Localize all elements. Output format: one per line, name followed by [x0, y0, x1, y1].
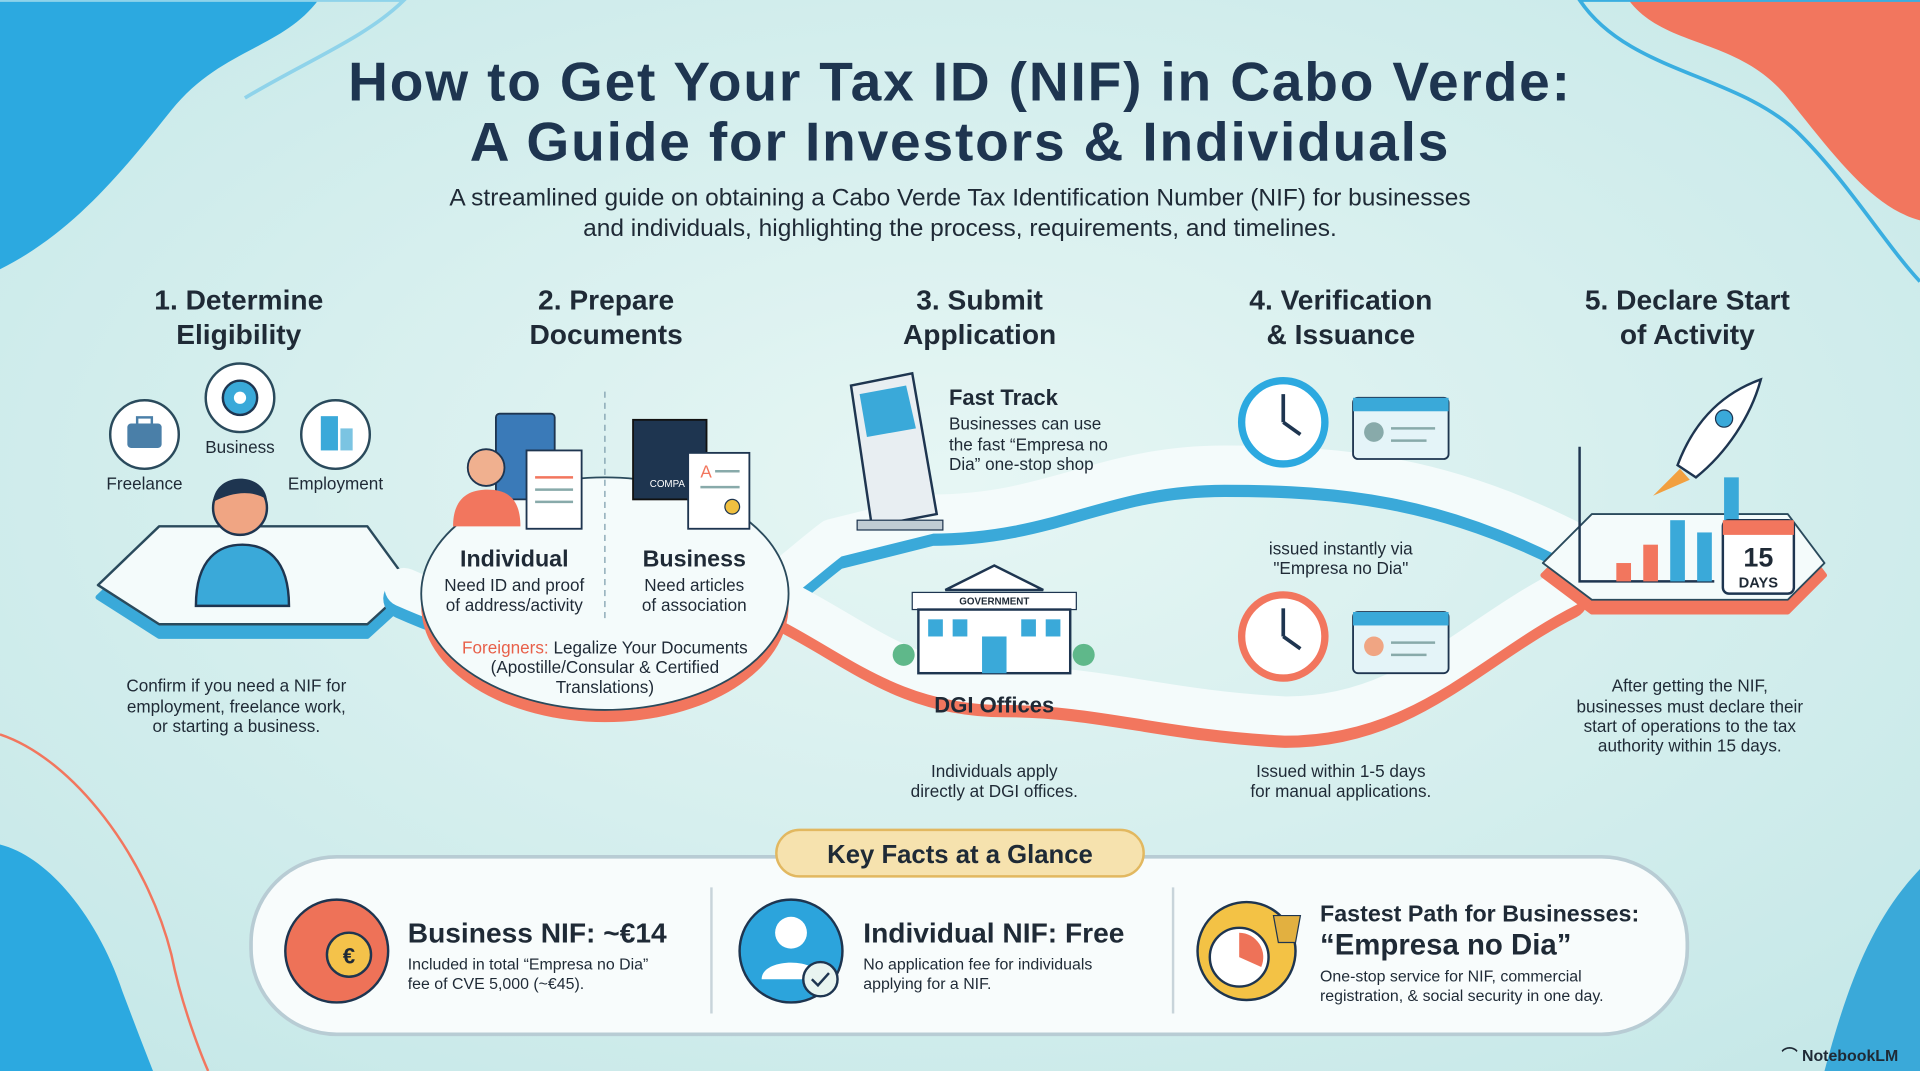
step 2: Documents	[529, 319, 683, 350]
path ribbon	[98, 465, 1824, 727]
icon: company documents	[633, 420, 749, 529]
step 2: 2. Prepare	[538, 285, 674, 316]
icon: government building	[893, 565, 1095, 673]
step 2: Foreigners: Legalize Your Documents	[462, 638, 748, 658]
fact: business fee: Included in total “Empresa no Dia”	[408, 956, 648, 973]
fact: business fee: fee of CVE 5,000 (~€45).	[408, 976, 584, 993]
subtitle	[449, 185, 1471, 242]
icon: business	[206, 364, 274, 432]
step 2: Need ID and proof	[444, 575, 585, 595]
icon: thinking person	[196, 479, 289, 606]
step 1: Freelance	[106, 474, 183, 494]
step 2: of association	[642, 595, 747, 615]
step 2: Business	[643, 546, 746, 572]
watermark: ⌒ NotebookLM	[1782, 1046, 1898, 1065]
step 1: Business	[205, 437, 275, 457]
title: A Guide for Investors & Individuals	[470, 110, 1450, 172]
step 5: 5. Declare Start	[1585, 285, 1790, 316]
step 1: Eligibility	[176, 319, 302, 350]
icon: rocket, chart, calendar: DAYS	[1739, 576, 1778, 592]
step 3: directly at DGI offices.	[911, 781, 1078, 801]
step 5	[1576, 285, 1803, 756]
subtitle: A streamlined guide on obtaining a Cabo Verde Tax Identification Number (NIF) for businesses	[449, 185, 1471, 212]
icon: kiosk	[851, 373, 943, 530]
step 2: of address/activity	[446, 595, 583, 615]
step 3: DGI Offices	[934, 692, 1054, 717]
step 5: start of operations to the tax	[1584, 716, 1796, 736]
step 2: Translations)	[556, 677, 654, 697]
step 1	[106, 285, 383, 736]
step 5: After getting the NIF,	[1612, 676, 1768, 696]
fact: business fee: Business NIF: ~€14	[408, 917, 667, 948]
fact: individual free: applying for a NIF.	[863, 976, 991, 993]
step 2: Individual	[460, 546, 569, 572]
icon: red clock and card	[1242, 595, 1449, 678]
step 4: & Issuance	[1267, 319, 1415, 350]
fact: business fee: €	[343, 943, 355, 968]
icon: blue clock and card	[1242, 381, 1449, 464]
step 1: Confirm if you need a NIF for	[126, 676, 347, 696]
step 4	[1242, 285, 1449, 801]
heading pill: Key Facts at a Glance	[827, 841, 1093, 869]
step 5: of Activity	[1620, 319, 1755, 350]
fact: fastest path: “Empresa no Dia”	[1320, 929, 1571, 962]
step 3: Dia” one-stop shop	[949, 454, 1094, 474]
step 4: 4. Verification	[1249, 285, 1432, 316]
step 4: issued instantly via	[1269, 538, 1413, 558]
step 3: Individuals apply	[931, 761, 1058, 781]
fact: fastest path: One-stop service for NIF, commercial	[1320, 969, 1582, 986]
icon: rocket, chart, calendar: 15	[1743, 543, 1773, 573]
subtitle: and individuals, highlighting the process, requirements, and timelines.	[583, 215, 1337, 242]
step 4: for manual applications.	[1250, 781, 1431, 801]
icon: employment	[301, 400, 370, 469]
fact: fastest path	[1198, 901, 1639, 1005]
fact: business fee	[285, 900, 667, 1002]
icon: rocket, chart, calendar	[1580, 379, 1794, 594]
icon: company documents: COMPA	[650, 479, 685, 490]
icon: freelance	[110, 400, 179, 469]
step 2	[444, 285, 749, 697]
fact: individual free	[740, 900, 1124, 1002]
step 1: or starting a business.	[153, 716, 320, 736]
step 3: Fast Track	[949, 385, 1059, 410]
step 3: 3. Submit	[916, 285, 1044, 316]
step 3: the fast “Empresa no	[949, 434, 1108, 454]
step 5: businesses must declare their	[1576, 696, 1803, 716]
icon: government building: GOVERNMENT	[959, 597, 1029, 608]
step 4: "Empresa no Dia"	[1273, 558, 1408, 578]
fact: fastest path: Fastest Path for Businesses:	[1320, 901, 1639, 927]
panel: key facts	[251, 830, 1687, 1034]
title: How to Get Your Tax ID (NIF) in Cabo Verde:	[348, 50, 1572, 112]
step 3: Application	[903, 319, 1056, 350]
fact: individual free: Individual NIF: Free	[863, 917, 1124, 948]
heading pill	[776, 830, 1144, 876]
step 3: Businesses can use	[949, 414, 1101, 434]
step 1: 1. Determine	[154, 285, 323, 316]
step 3	[851, 285, 1108, 801]
step 5: authority within 15 days.	[1598, 736, 1782, 756]
icon: company documents: A	[700, 461, 712, 481]
step 1: employment, freelance work,	[127, 696, 346, 716]
step 2: Need articles	[644, 575, 744, 595]
fact: individual free: No application fee for individuals	[863, 956, 1092, 973]
step 1: Employment	[288, 474, 383, 494]
step 4: Issued within 1-5 days	[1256, 761, 1426, 781]
step 2: (Apostille/Consular & Certified	[491, 657, 719, 677]
title	[348, 50, 1572, 172]
icon: individual documents	[453, 414, 582, 529]
fact: fastest path: registration, & social security in one day.	[1320, 988, 1604, 1005]
